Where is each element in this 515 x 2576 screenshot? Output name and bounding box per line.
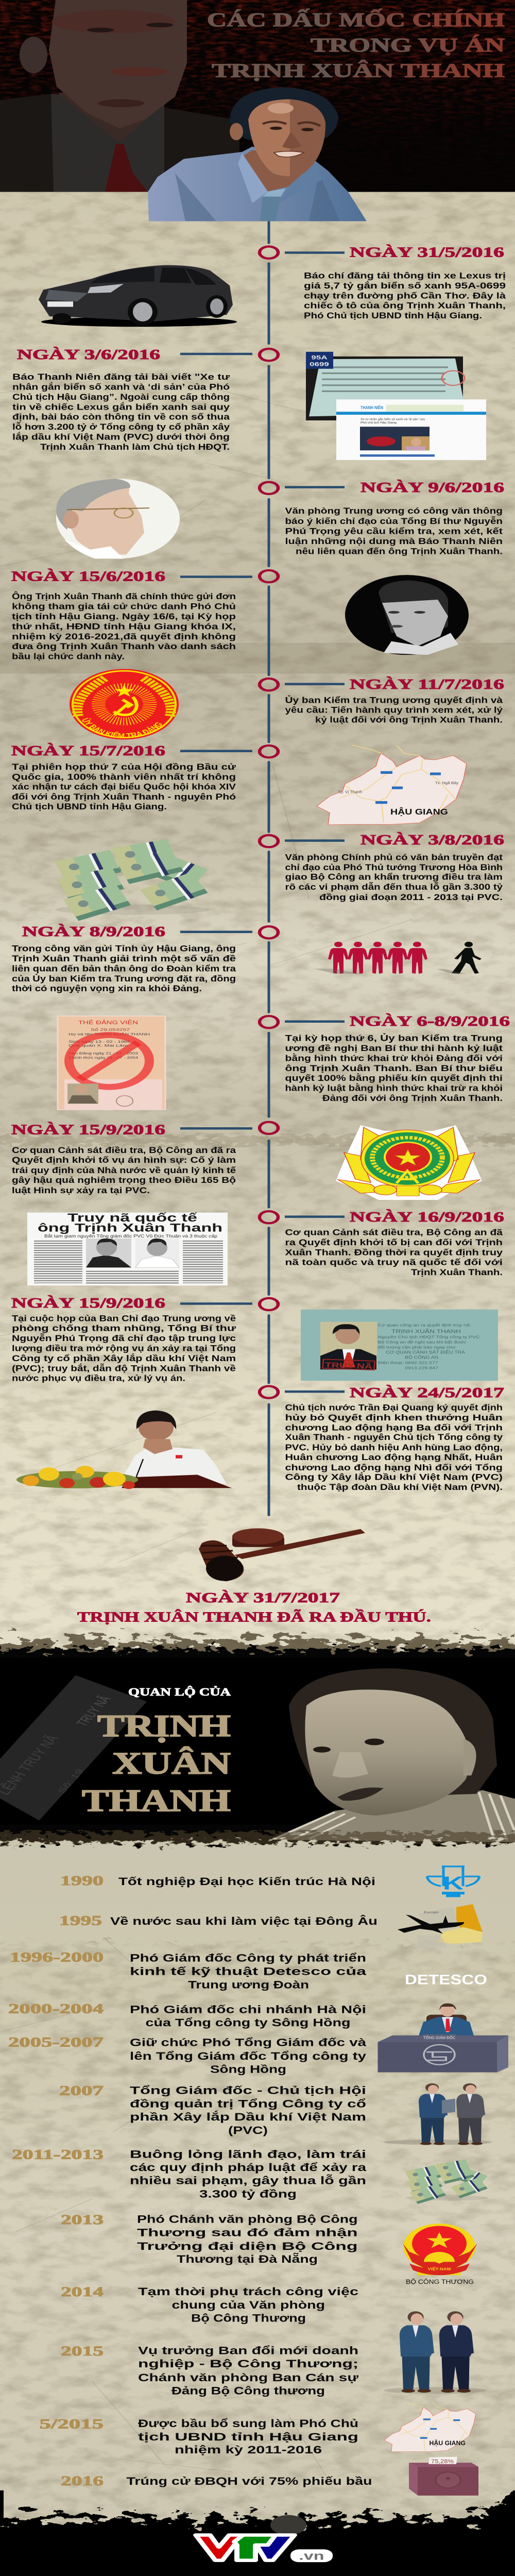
image: party membership card crossed out: Số 29.053257: [91, 1027, 130, 1032]
description: [138, 2285, 358, 2324]
text block: Chủ tịch UBND tỉnh Hậu Giang.: [12, 802, 167, 811]
blue licence plate: 0699: [310, 361, 329, 368]
image: wanted notice: TRỊNH XUÂN THANH: [391, 1328, 461, 1334]
text block: Trong công văn gửi Tỉnh ủy Hậu Giang, ông: [12, 944, 236, 953]
description: Đảng Bộ Công thương: [171, 2384, 325, 2397]
career row: 2011-2013: [12, 2147, 489, 2204]
image: wanted notice: [301, 1310, 498, 1381]
description: phần Xây lắp Dầu khí Việt Nam: [130, 2111, 366, 2123]
icon: ballot box: [409, 2457, 478, 2496]
icon: national emblem: VIỆT NAM: [428, 2267, 451, 2271]
description: Tạm thời phụ trách công việc: [138, 2285, 358, 2298]
career row: 1995: [59, 1904, 483, 1948]
ghost portrait background: [0, 0, 239, 192]
text block: [12, 1314, 236, 1383]
event: 3/8/2016: [55, 832, 504, 921]
icon: Europe map with plane: Europe: [424, 1910, 439, 1914]
text block: xác nhận tư cách đại biểu Quốc hội khóa XIV: [12, 783, 236, 791]
text block: [285, 1403, 503, 1492]
text block: [12, 372, 230, 452]
description: đồng quản trị Tổng Công ty cổ: [130, 2097, 366, 2110]
text block: Tại phiên họp thứ 7 của Hội đồng Bầu cử: [12, 762, 236, 772]
text block: [285, 1033, 503, 1103]
text block: Trịnh Xuân Thanh giải trình một số vấn đề: [12, 954, 236, 963]
heading: NGÀY 11/7/2016: [350, 676, 504, 692]
description: [138, 2417, 358, 2456]
description: [130, 2036, 367, 2075]
description: kinh tế kỹ thuật Detesco của: [130, 1965, 367, 1977]
event: 8/9/2016: [12, 923, 482, 993]
sepia portrait: [269, 1668, 515, 1842]
description: nghiệp - Bộ Công Thương;: [138, 2358, 358, 2370]
image: wanted notice: TRUY NÃ: [324, 1361, 373, 1370]
text block: [285, 506, 503, 556]
event: 11/7/2016: [70, 669, 504, 740]
news website screenshot: THANH NIÊN: [360, 405, 383, 410]
icon: group and person walking away: [314, 942, 482, 974]
heading: NGÀY 15/9/2016: [11, 1295, 165, 1311]
heading: name: [82, 1708, 231, 1818]
description: [138, 2344, 359, 2397]
year: 2016: [61, 2474, 104, 2488]
image: party membership card crossed out: THẺ ĐẢNG VIÊN: [78, 1020, 138, 1026]
description: [130, 2084, 366, 2137]
main portrait illustration: [148, 87, 367, 221]
career row: 2005-2007: [8, 2004, 508, 2075]
image: president at podium: [16, 1411, 232, 1489]
text block: Tại cuộc họp của Ban Chỉ đạo Trung ương về: [12, 1314, 236, 1323]
text block: thời có nguyện vọng xin ra khỏi Đảng.: [12, 984, 202, 993]
description: Giữ chức Phó Tổng Giám đốc và: [130, 2036, 367, 2048]
year: 2005-2007: [8, 2035, 104, 2050]
text block: hủy bỏ Quyết định khen thưởng Huân: [285, 1413, 503, 1422]
text block: tịch tỉnh Hậu Giang. Ngày 16/6, tại Kỳ họp: [12, 612, 236, 621]
description: Vụ trưởng Ban đổi mới doanh: [138, 2344, 358, 2357]
heading: NGÀY 8/9/2016: [22, 923, 165, 939]
career row: 1996-2000: [10, 1950, 487, 1991]
text block: lượng điều tra mở rộng vụ án xảy ra tại Tổng: [12, 1344, 236, 1353]
text block: đưa ông Trịnh Xuân Thanh vào danh sách: [12, 642, 236, 651]
text block: bầu lại chức danh này.: [12, 652, 125, 661]
year: 2000-2004: [8, 2002, 104, 2016]
event: 31/5/2016: [39, 244, 506, 327]
text block: Chủ tịch Hậu Giang”. Ngoài cung cấp thông: [12, 393, 230, 402]
heading: quan lộ: QUAN LỘ CỦA: [128, 1686, 231, 1698]
heading: NGÀY 3/8/2016: [360, 832, 504, 848]
image: party membership card crossed out: Vào Đảng ngày 21 - 07 - 2003: [68, 1051, 138, 1055]
heading: NGÀY 15/9/2016: [11, 1122, 165, 1138]
icon: university logo: K: [443, 1872, 464, 1893]
description: nhiệm kỳ 2011-2016: [175, 2444, 322, 2456]
timeline axis: [268, 222, 270, 1515]
car image: [39, 265, 237, 327]
text block: [285, 853, 503, 902]
timeline connectors: [180, 251, 345, 1393]
image: banknote bundles small: [405, 2159, 489, 2204]
text block: nước phục vụ điều tra, xử lý vụ án.: [12, 1374, 185, 1383]
heading: NGÀY 24/5/2017: [350, 1384, 504, 1400]
text block: [12, 762, 236, 811]
text block: Quốc gia, 100% thành viên nhất trí không: [12, 773, 236, 782]
news website screenshot: Xe tư nhân gắn biển số xanh và 'di sản' của: [360, 417, 425, 421]
description: tịch UBND tỉnh Hậu Giang: [138, 2431, 358, 2443]
description: Sông Hồng: [210, 2063, 286, 2075]
event: 15/9/2016 police: [11, 1122, 482, 1200]
heading: name: THANH: [82, 1783, 231, 1818]
text block: [12, 592, 236, 661]
image: newspaper clipping: Truy nã quốc tế: [67, 1212, 197, 1224]
blue licence plate: [306, 352, 333, 369]
event: 9/6/2016: [56, 479, 504, 558]
career row: 2013: [61, 2213, 477, 2285]
text block: định, bài báo còn thông tin về con số thua: [12, 413, 230, 422]
icon: party inspection emblem: [70, 669, 179, 740]
description: chung của Văn phòng: [172, 2299, 325, 2311]
map: Hậu Giang: Tx. Ngã Bảy: [435, 781, 458, 785]
description: [130, 1952, 367, 1991]
text block: nhân gắn biển số xanh và ‘di sản’ của Phó: [12, 382, 230, 392]
description: Phó Giám đốc chi nhánh Hà Nội: [130, 2003, 366, 2015]
blue licence plate: 95A: [311, 354, 328, 361]
heading: name: XUÂN: [112, 1746, 231, 1781]
panel: career section dark band: [0, 1640, 515, 1943]
icon: handshake: [384, 2311, 487, 2394]
icon: two men exchanging folder: [384, 2083, 492, 2145]
year: 5/2015: [39, 2417, 104, 2432]
text block: [12, 944, 236, 993]
icon: police emblem: [336, 1125, 482, 1200]
image: wanted notice: CƠ QUAN CẢNH SÁT ĐIỀU TRA: [386, 1350, 466, 1355]
event: 15/9/2016 steering committee: [11, 1295, 498, 1383]
image: arrest warrant document: [0, 1675, 147, 1821]
image: wanted notice: BỘ CÔNG AN: [405, 1355, 438, 1360]
map: Hậu Giang: [317, 745, 467, 825]
year: 1995: [59, 1913, 102, 1928]
career row: 2000-2004: [8, 2002, 366, 2029]
text block: [285, 1228, 503, 1277]
image: arrest warrant document: TRUY NÃ: [73, 1694, 114, 1728]
map: Hậu Giang small: HẬU GIANG: [430, 2439, 466, 2447]
text block: Công ty cổ phần Xây lắp dầu khí Việt Nam: [12, 1353, 236, 1363]
icon: ballot box: 75,28%: [431, 2459, 454, 2465]
icon: national emblem: [403, 2224, 477, 2285]
image: party membership card crossed out: [58, 1016, 165, 1110]
text block: Trịnh Xuân Thanh làm Chủ tịch HĐQT.: [40, 443, 230, 452]
year: 2007: [59, 2083, 104, 2098]
career row: 2007: [59, 2083, 492, 2145]
heading: NGÀY 15/6/2016: [11, 568, 165, 584]
text block: lắp dầu khí Việt Nam (PVC) dưới thời ông: [12, 432, 230, 442]
news website screenshot: Phó chủ tịch Hậu Giang: [360, 420, 397, 424]
description: lên Tổng Giám đốc Tổng công ty: [130, 2050, 367, 2062]
closing heading: [77, 1589, 431, 1625]
description: Trung ương Đoàn: [188, 1978, 309, 1991]
image: banknote bundles: [55, 839, 210, 921]
image: wanted notice: 0913.229.847: [405, 1366, 438, 1370]
image: party membership card crossed out: Họ và tên TRỊNH XUÂN THANH: [68, 1032, 150, 1036]
timeline rings: [260, 246, 278, 1398]
year: 2014: [61, 2285, 104, 2299]
logo: VTV.vn: [196, 2535, 333, 2563]
text block: Nguyễn Phú Trọng đã chỉ đạo tập trung lực: [12, 1334, 236, 1343]
closing heading: TRỊNH XUÂN THANH ĐÃ RA ĐẦU THÚ.: [77, 1609, 431, 1625]
text block: tin về chiếc Lexus gắn biển xanh sai quy: [12, 402, 230, 412]
portrait: Nguyễn Phú Trọng: [56, 479, 180, 558]
description: nhiều sai phạm, gây thua lỗ gần: [130, 2174, 366, 2187]
year: 1990: [60, 1874, 104, 1888]
text block: gây hậu quả nghiêm trọng theo Điều 165 Bộ: [12, 1176, 236, 1185]
text block: Quyết định khởi tố vụ án hình sự: Cố ý làm: [12, 1156, 236, 1165]
description: các quy định pháp luật để xảy ra: [130, 2161, 367, 2173]
text block: thứ nhất, HĐND tỉnh Hậu Giang khóa IX,: [12, 622, 236, 631]
heading: NGÀY 9/6/2016: [360, 479, 504, 495]
description: Được bầu bổ sung làm Phó Chủ: [138, 2417, 358, 2430]
title: [207, 8, 505, 81]
text block: của Ủy ban Kiểm tra Trung ương đặt ra, đồng: [12, 974, 236, 984]
map: Hậu Giang: HẬU GIANG: [390, 807, 448, 817]
text block: Báo Thanh Niên đăng tải bài viết "Xe tư: [12, 372, 230, 382]
panel: dark header: [0, 0, 515, 192]
closing heading: NGÀY 31/7/2017: [186, 1589, 340, 1605]
event: 24/5/2017: [16, 1384, 504, 1492]
description: Phó Chánh văn phòng Bộ Công: [137, 2213, 358, 2225]
text block: luật Hình sự xảy ra tại PVC.: [12, 1186, 150, 1195]
description: Về nước sau khi làm việc tại Đông Âu: [110, 1915, 377, 1927]
description: của Tổng công ty Sông Hồng: [145, 2016, 350, 2029]
career row: 5/2015: [39, 2402, 476, 2456]
image: wanted notice: Cơ quan công an ra quyết định truy nã:: [378, 1323, 471, 1328]
logo: VTV.vn: .vn: [299, 2550, 324, 2563]
description: Tổng Giám đốc - Chủ tịch Hội: [130, 2084, 366, 2096]
text block: liên quan đến bản thân ông do Đoàn kiểm tra: [12, 964, 236, 973]
description: [137, 2213, 357, 2265]
career row: 2016: [61, 2457, 478, 2496]
text block: phòng chống tham nhũng, Tổng Bí thư: [12, 1324, 236, 1333]
description: (PVC): [228, 2124, 268, 2137]
heading: NGÀY 16/9/2016: [350, 1209, 504, 1225]
text block: đối với ông Trịnh Xuân Thanh - nguyên Phó: [12, 792, 236, 802]
heading: NGÀY 3/6/2016: [17, 346, 160, 362]
description: Bộ Công Thương: [191, 2312, 306, 2324]
timeline: [180, 222, 345, 1515]
description: Thương sau đó đảm nhận: [137, 2226, 358, 2239]
heading: NGÀY 31/5/2016: [350, 244, 504, 260]
image: party membership card crossed out: Quê quán X. Mai Lâm: [68, 1043, 128, 1047]
year: 2015: [61, 2344, 104, 2359]
event: 15/6/2016: [11, 568, 469, 661]
image: wanted notice: Điện thoại: 0692.322.577: [378, 1361, 438, 1365]
career row: 1990: [60, 1866, 479, 1897]
logo: Detesco: DETESCO: [405, 1973, 487, 1988]
description: 3.300 tỷ đồng: [199, 2188, 297, 2200]
map: Hậu Giang small: [384, 2402, 476, 2452]
text block: trái quy định của Nhà nước về quản lý kinh tế: [12, 1166, 236, 1175]
description: Buông lỏng lãnh đạo, làm trái: [130, 2148, 366, 2160]
text block: (PVC); truy bắt, dẫn độ Trịnh Xuân Thanh về: [12, 1364, 236, 1373]
description: [130, 2148, 367, 2200]
icon: university logo: [427, 1866, 479, 1897]
text block: Cơ quan Cảnh sát điều tra, Bộ Công an đã ra: [12, 1146, 236, 1155]
text block: Ông Trịnh Xuân Thanh đã chính thức gửi đơn: [12, 592, 236, 601]
text block: nhiệm kỳ 2016-2021,đã quyết định không: [12, 632, 236, 641]
heading: name: TRỊNH: [97, 1708, 231, 1743]
image: newspaper clipping: ông Trịnh Xuân Thanh: [38, 1222, 222, 1234]
description: Tốt nghiệp Đại học Kiến trúc Hà Nội: [118, 1875, 375, 1888]
registration document: [306, 352, 486, 460]
career row: 2014: [61, 2285, 358, 2324]
image: wanted notice: đối tượng cần phải báo ngay cho:: [378, 1345, 456, 1350]
icon: party inspection emblem: ỦY BAN KIỂM TRA ĐẢNG: [82, 718, 162, 737]
image: newspaper clipping: Bắt tạm giam nguyên Tổng giám đốc PVC Vũ Đức Thuận và 3 thuộc cấp: [44, 1233, 217, 1239]
year: 1996-2000: [10, 1950, 104, 1965]
image: wanted notice: Bộ Công an đề nghị sau khi bắt được: [378, 1340, 467, 1345]
image: arrest warrant document: Số: 19: [56, 1768, 86, 1794]
description: [130, 2003, 366, 2029]
year: 2011-2013: [12, 2147, 104, 2162]
year: 2013: [61, 2213, 104, 2227]
text block: [12, 1146, 236, 1195]
icon: director at desk: [378, 2004, 508, 2072]
text block: [285, 696, 503, 724]
text block: không tham gia tái cử chức danh Phó Chủ: [12, 602, 236, 611]
event: 6-8/9/2016: [58, 1013, 510, 1110]
image: party membership card crossed out: Sinh ngày 13 - 02 - 1966: [68, 1040, 130, 1043]
heading: NGÀY 15/7/2016: [11, 742, 165, 758]
event: 16/9/2016: [27, 1209, 504, 1285]
portrait: Trịnh Xuân Thanh: [345, 575, 469, 655]
career row: 2015: [61, 2311, 487, 2397]
text block: lỗ hơn 3.200 tỷ ở Tổng công ty cổ phần xây: [12, 422, 230, 432]
icon: director at desk: TỔNG GIÁM ĐỐC: [423, 2036, 455, 2040]
icon: gavel: [199, 1529, 365, 1581]
event: 3/6/2016: [12, 346, 486, 460]
emblem caption: BỘ CÔNG THƯƠNG: [406, 2278, 474, 2285]
description: Phó Giám đốc Công ty phát triển: [130, 1952, 366, 1964]
icon: Europe map with plane: [398, 1904, 483, 1948]
description: Thương tại Đà Nẵng: [177, 2252, 318, 2265]
image: party membership card crossed out: Chính thức ngày 21 - 07 - 2004: [68, 1056, 138, 1059]
image: wanted notice: Nguyên Chủ tịch HĐQT Tổng công ty PVC: [378, 1334, 480, 1340]
heading: NGÀY 6-8/9/2016: [350, 1013, 510, 1029]
news website screenshot: [336, 399, 486, 460]
description: Trưởng đại diện Bộ Công: [137, 2240, 358, 2252]
footer: dark torn band: [0, 2490, 515, 2576]
description: Trúng cử ĐBQH với 75% phiếu bầu: [127, 2475, 372, 2487]
event: 15/7/2016: [11, 742, 467, 825]
text block: [304, 272, 506, 320]
closing: gavel and surrender date: [77, 1529, 431, 1625]
description: Chánh văn phòng Ban Cán sự: [138, 2371, 359, 2383]
image: newspaper clipping: [27, 1212, 228, 1285]
map: Hậu Giang: Tp. Vị Thanh: [338, 790, 362, 794]
